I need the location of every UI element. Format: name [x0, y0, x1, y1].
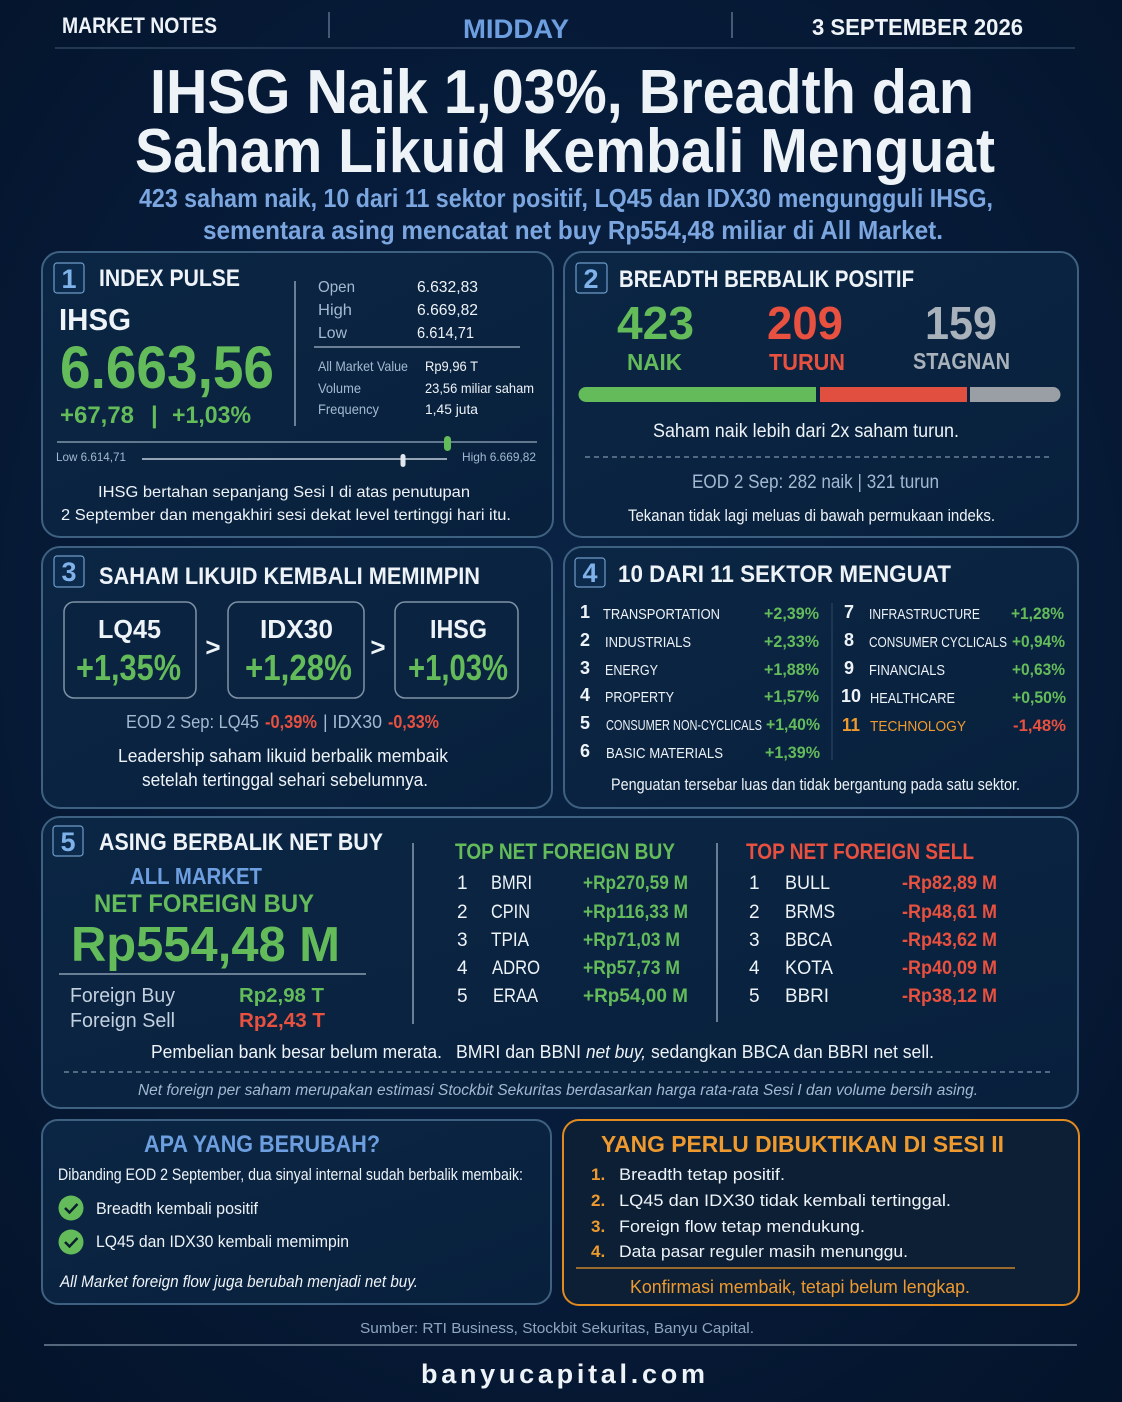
- index label: IHSG: [59, 302, 131, 337]
- number badge 3: [54, 556, 84, 587]
- numbered list: 4.: [591, 1242, 605, 1261]
- table: top net foreign sell: -Rp48,61 M: [902, 902, 997, 923]
- sector table left: INDUSTRIALS: [605, 634, 691, 651]
- table: top net foreign buy: +Rp57,73 M: [583, 958, 680, 979]
- stat: turun: TURUN: [769, 349, 845, 375]
- panel 1 note: [61, 484, 511, 524]
- stat: turun: [767, 297, 845, 375]
- card: IDX30: [228, 602, 364, 698]
- sector table right: -1,48%: [1013, 716, 1066, 735]
- OHLC stats: [318, 279, 478, 342]
- sector table left: 6: [580, 741, 590, 761]
- table: top net foreign sell: 3: [749, 930, 760, 951]
- arrow: greater than: >: [370, 632, 386, 662]
- number badge 4: [575, 558, 605, 588]
- panel 5 note: BMRI dan BBNI: [456, 1042, 581, 1062]
- table: top net foreign buy: TOP NET FOREIGN BUY: [455, 839, 675, 864]
- table: top net foreign sell: 4: [749, 958, 760, 979]
- sector table right: FINANCIALS: [869, 662, 945, 679]
- range slider: [56, 436, 537, 467]
- panel 3: liquid stocks: [42, 547, 552, 808]
- panel 1: index pulse: [42, 252, 553, 537]
- table: top net foreign buy: +Rp116,33 M: [583, 902, 688, 923]
- panel 5: foreign flow: [42, 817, 1078, 1108]
- sector table left: 3: [580, 658, 590, 678]
- net foreign buy summary: NET FOREIGN BUY: [94, 890, 314, 918]
- check item: leadership: [58, 1230, 349, 1254]
- table: top net foreign buy: 5: [457, 986, 468, 1007]
- index value: 6.663,56: [60, 334, 274, 401]
- subtitle: [139, 183, 993, 245]
- range slider: Low 6.614,71: [56, 450, 126, 464]
- table: top net foreign sell: BRMS: [785, 902, 835, 923]
- numbered list: Foreign flow tetap mendukung.: [619, 1217, 865, 1236]
- EOD comparison: | IDX30: [323, 712, 382, 732]
- OHLC stats: 6.669,82: [417, 302, 478, 319]
- breadth statement: Saham naik lebih dari 2x saham turun.: [653, 421, 959, 442]
- title: Saham Likuid Kembali Menguat: [135, 117, 995, 186]
- table: top net foreign buy: ADRO: [492, 958, 540, 979]
- market stats: Frequency: [318, 401, 379, 417]
- market stats: 23,56 miliar saham: [425, 380, 534, 396]
- table: top net foreign sell: -Rp40,09 M: [902, 958, 997, 979]
- panel 4 note: Penguatan tersebar luas dan tidak bergantung pada satu sektor.: [611, 775, 1020, 794]
- card: LQ45: [64, 602, 196, 698]
- table: top net foreign buy: BMRI: [491, 873, 532, 894]
- panel 2 note: Tekanan tidak lagi meluas di bawah permukaan indeks.: [628, 506, 995, 525]
- sector table left: BASIC MATERIALS: [606, 745, 723, 762]
- sector table right: TECHNOLOGY: [870, 718, 966, 735]
- arrow: greater than: >: [205, 632, 221, 662]
- sector table right: +0,50%: [1012, 688, 1066, 707]
- OHLC stats: Low: [318, 325, 347, 342]
- table: top net foreign sell: BBCA: [785, 930, 832, 951]
- header bar: MARKET NOTES: [62, 13, 217, 38]
- check item: breadth: Breadth kembali positif: [96, 1199, 258, 1218]
- panel 5 note: net buy,: [586, 1042, 646, 1062]
- sector table left: +2,33%: [764, 632, 819, 651]
- panel: what changed: [42, 1120, 551, 1304]
- EOD comparison: EOD 2 Sep: LQ45: [126, 712, 259, 732]
- number badge 1: [54, 263, 84, 294]
- card: IHSG: IHSG: [430, 614, 487, 644]
- card: IHSG: [395, 602, 518, 698]
- heading: session II: YANG PERLU DIBUKTIKAN DI SESI II: [601, 1131, 1004, 1157]
- panel 5 note: Pembelian bank besar belum merata.: [151, 1042, 442, 1062]
- sector table right: 9: [844, 658, 854, 678]
- number badge 5: 5: [60, 827, 76, 857]
- sector table left: ENERGY: [605, 662, 658, 679]
- table: top net foreign buy: 2: [457, 902, 468, 923]
- market stats: [318, 358, 534, 417]
- sector table right: 11: [842, 715, 860, 735]
- subtitle: 423 saham naik, 10 dari 11 sektor positif, LQ45 dan IDX30 mengungguli IHSG,: [139, 183, 993, 213]
- table: top net foreign sell: KOTA: [785, 958, 833, 979]
- numbered list: 2.: [591, 1191, 605, 1210]
- card: LQ45: LQ45: [98, 614, 161, 644]
- header bar: MIDDAY: [463, 14, 569, 44]
- net foreign buy summary: [59, 863, 366, 1032]
- table: top net foreign buy: 4: [457, 958, 468, 979]
- table: top net foreign buy: +Rp71,03 M: [583, 930, 680, 951]
- table: top net foreign sell: -Rp82,89 M: [902, 873, 997, 894]
- index change: |: [151, 402, 158, 429]
- breadth bar: [579, 387, 1061, 402]
- stat: stagnan: [913, 297, 1010, 374]
- sector table left: PROPERTY: [605, 689, 674, 706]
- sector table left: +2,39%: [764, 604, 819, 623]
- sector table right: 10: [841, 686, 861, 706]
- table: top net foreign buy: TPIA: [491, 930, 529, 951]
- panel 3 note: Leadership saham likuid berbalik membaik: [118, 746, 449, 766]
- sector table left: 2: [580, 630, 590, 650]
- sector table left: +1,57%: [764, 687, 819, 706]
- number badge 1: 1: [61, 264, 77, 294]
- title: [135, 58, 995, 186]
- net foreign buy summary: Rp2,98 T: [239, 985, 324, 1007]
- index change: +67,78: [60, 402, 134, 429]
- numbered list: LQ45 dan IDX30 tidak kembali tertinggal.: [619, 1191, 951, 1210]
- numbered list: Data pasar reguler masih menunggu.: [619, 1242, 908, 1261]
- table: top net foreign buy: 3: [457, 930, 468, 951]
- card: IDX30: IDX30: [260, 614, 333, 644]
- sector table right: +1,28%: [1011, 604, 1064, 623]
- sector table right: CONSUMER CYCLICALS: [869, 634, 1007, 651]
- net foreign buy summary: Rp2,43 T: [239, 1010, 325, 1032]
- check item: breadth: [58, 1196, 258, 1220]
- table: top net foreign buy: ERAA: [493, 986, 538, 1007]
- sector table left: +1,40%: [766, 715, 820, 734]
- sector table left: CONSUMER NON-CYCLICALS: [606, 717, 762, 734]
- panel: session II checklist: [563, 1120, 1079, 1305]
- panel 3 note: [118, 746, 449, 790]
- sector table right: [841, 602, 1066, 735]
- market stats: Rp9,96 T: [425, 358, 478, 374]
- sector table left: 5: [580, 713, 590, 733]
- session II verdict: Konfirmasi membaik, tetapi belum lengkap.: [630, 1277, 970, 1297]
- number badge 5: [53, 826, 83, 857]
- net foreign buy summary: Foreign Buy: [70, 985, 175, 1007]
- numbered list: Breadth tetap positif.: [619, 1165, 785, 1184]
- sector table left: TRANSPORTATION: [603, 606, 720, 623]
- table: top net foreign buy: [455, 839, 688, 1007]
- card: IDX30: +1,28%: [245, 647, 352, 688]
- panel 3 note: setelah tertinggal sehari sebelumnya.: [142, 770, 428, 790]
- net foreign buy summary: Foreign Sell: [70, 1010, 175, 1032]
- EOD comparison: EOD 2 Sep: 282 naik | 321 turun: [692, 472, 939, 493]
- sector table right: +0,94%: [1012, 632, 1065, 651]
- heading: sectors: 10 DARI 11 SEKTOR MENGUAT: [618, 561, 951, 588]
- table: top net foreign sell: BBRI: [785, 986, 829, 1007]
- stat: naik: NAIK: [627, 349, 682, 375]
- title: IHSG Naik 1,03%, Breadth dan: [150, 58, 974, 127]
- stat: naik: [617, 297, 694, 375]
- table: top net foreign buy: +Rp54,00 M: [583, 986, 688, 1007]
- heading: liquid stocks: SAHAM LIKUID KEMBALI MEMIMPIN: [99, 563, 480, 590]
- panel 4: sectors: [564, 547, 1078, 808]
- stat: turun: 209: [767, 297, 843, 349]
- stat: naik: 423: [617, 297, 694, 349]
- market stats: All Market Value: [318, 358, 408, 374]
- OHLC stats: 6.614,71: [417, 325, 474, 342]
- index change: [60, 402, 251, 429]
- OHLC stats: Open: [318, 279, 355, 296]
- heading: index pulse: INDEX PULSE: [99, 265, 240, 292]
- index change: +1,03%: [172, 402, 251, 429]
- market stats: 1,45 juta: [425, 401, 478, 417]
- table: top net foreign sell: -Rp38,12 M: [902, 986, 997, 1007]
- intro text: Dibanding EOD 2 September, dua sinyal internal sudah berbalik membaik:: [58, 1166, 523, 1184]
- market stats: Volume: [318, 380, 361, 396]
- check item: leadership: LQ45 dan IDX30 kembali memimpin: [96, 1232, 349, 1251]
- EOD comparison: -0,39%: [265, 712, 317, 732]
- website: banyucapital.com: [421, 1359, 705, 1389]
- panel 5 note: sedangkan BBCA dan BBRI net sell.: [651, 1042, 934, 1062]
- numbered list: [591, 1165, 951, 1261]
- number badge 3: 3: [61, 557, 77, 587]
- header bar: 3 SEPTEMBER 2026: [812, 14, 1023, 40]
- panel 1 note: 2 September dan mengakhiri sesi dekat level tertinggi hari itu.: [61, 507, 511, 524]
- table: top net foreign sell: TOP NET FOREIGN SELL: [746, 839, 974, 864]
- table: top net foreign buy: +Rp270,59 M: [583, 873, 688, 894]
- card: LQ45: +1,35%: [76, 647, 181, 688]
- sector table right: +0,63%: [1012, 660, 1065, 679]
- sector table left: [580, 602, 820, 762]
- numbered list: 1.: [591, 1165, 605, 1184]
- EOD comparison: [126, 712, 439, 732]
- stat: stagnan: STAGNAN: [913, 348, 1010, 374]
- net foreign buy summary: ALL MARKET: [130, 863, 262, 889]
- heading: foreign flow: ASING BERBALIK NET BUY: [99, 829, 383, 856]
- italic note: All Market foreign flow juga berubah menjadi net buy.: [59, 1272, 418, 1291]
- table: top net foreign sell: -Rp43,62 M: [902, 930, 997, 951]
- panel 1 note: IHSG bertahan sepanjang Sesi I di atas penutupan: [98, 484, 470, 501]
- table: top net foreign sell: 2: [749, 902, 760, 923]
- methodology footnote: Net foreign per saham merupakan estimasi Stockbit Sekuritas berdasarkan harga rata-rata Sesi I dan volume bersih asing.: [138, 1082, 978, 1099]
- number badge 2: [576, 263, 607, 294]
- sector table right: HEALTHCARE: [870, 690, 955, 707]
- card: IHSG: +1,03%: [408, 647, 508, 688]
- table: top net foreign sell: 5: [749, 986, 760, 1007]
- EOD comparison: -0,33%: [388, 712, 439, 732]
- OHLC stats: 6.632,83: [417, 279, 478, 296]
- source line: Sumber: RTI Business, Stockbit Sekuritas, Banyu Capital.: [360, 1320, 754, 1337]
- sector table right: INFRASTRUCTURE: [869, 606, 980, 623]
- sector table left: +1,88%: [764, 660, 819, 679]
- stat: stagnan: 159: [925, 297, 997, 349]
- table: top net foreign sell: [746, 839, 997, 1007]
- sector table right: 8: [844, 630, 854, 650]
- net foreign buy summary: Rp554,48 M: [71, 918, 340, 972]
- table: top net foreign sell: 1: [749, 873, 760, 894]
- heading: what changed: APA YANG BERUBAH?: [144, 1131, 380, 1158]
- numbered list: 3.: [591, 1217, 605, 1236]
- sector table left: 4: [580, 685, 590, 705]
- range slider: High 6.669,82: [462, 450, 536, 464]
- table: top net foreign sell: BULL: [785, 873, 830, 894]
- panel 2: breadth: [564, 252, 1078, 537]
- table: top net foreign buy: CPIN: [491, 902, 530, 923]
- header bar: [55, 12, 1075, 48]
- OHLC stats: High: [318, 302, 352, 319]
- panel 5 note: [151, 1042, 934, 1062]
- heading: breadth: BREADTH BERBALIK POSITIF: [619, 266, 914, 293]
- sector table left: 1: [580, 602, 590, 622]
- sector table right: 7: [844, 602, 854, 622]
- sector table left: +1,39%: [765, 743, 820, 762]
- subtitle: sementara asing mencatat net buy Rp554,48 miliar di All Market.: [203, 215, 943, 245]
- table: top net foreign buy: 1: [457, 873, 468, 894]
- number badge 2: 2: [583, 264, 599, 294]
- number badge 4: 4: [582, 558, 598, 588]
